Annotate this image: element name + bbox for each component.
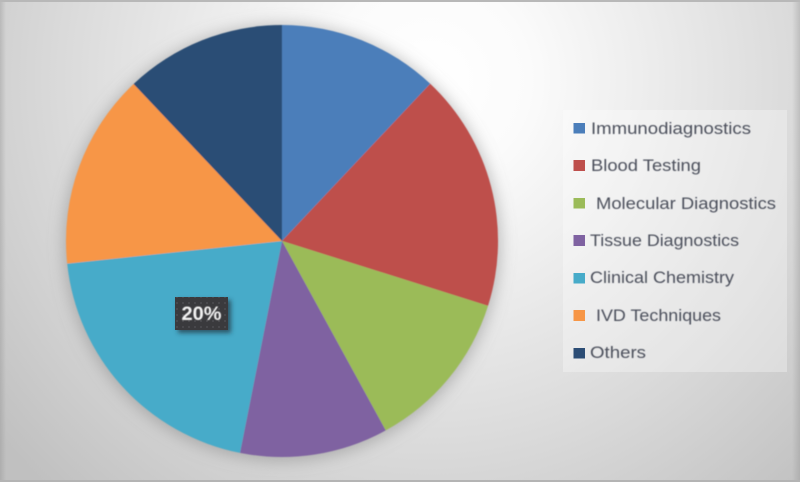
legend item: Tissue Diagnostics: Tissue Diagnostics	[590, 231, 739, 250]
legend item: Blood Testing: Blood Testing	[591, 156, 701, 175]
slice: IVD Techniques	[66, 84, 282, 264]
legend item: Others: Others	[590, 343, 646, 362]
legend item: IVD Techniques: IVD Techniques	[596, 306, 721, 325]
slice: Tissue Diagnostics	[240, 241, 386, 457]
slice: Immunodiagnostics	[282, 25, 430, 241]
legend item: Clinical Chemistry: Clinical Chemistry	[590, 268, 735, 287]
slice: Molecular Diagnostics	[282, 241, 488, 430]
data label: 20%: 20%	[182, 304, 222, 325]
legend item: Molecular Diagnostics: Molecular Diagnostics	[596, 194, 776, 213]
data label: 20%	[175, 297, 231, 333]
pie shadow	[64, 25, 500, 461]
slice: Blood Testing	[282, 84, 498, 306]
slice: Others	[134, 25, 282, 241]
legend	[563, 110, 787, 372]
pie chart	[66, 25, 498, 457]
slice: Clinical Chemistry	[67, 241, 282, 453]
legend item: Immunodiagnostics: Immunodiagnostics	[591, 119, 751, 138]
